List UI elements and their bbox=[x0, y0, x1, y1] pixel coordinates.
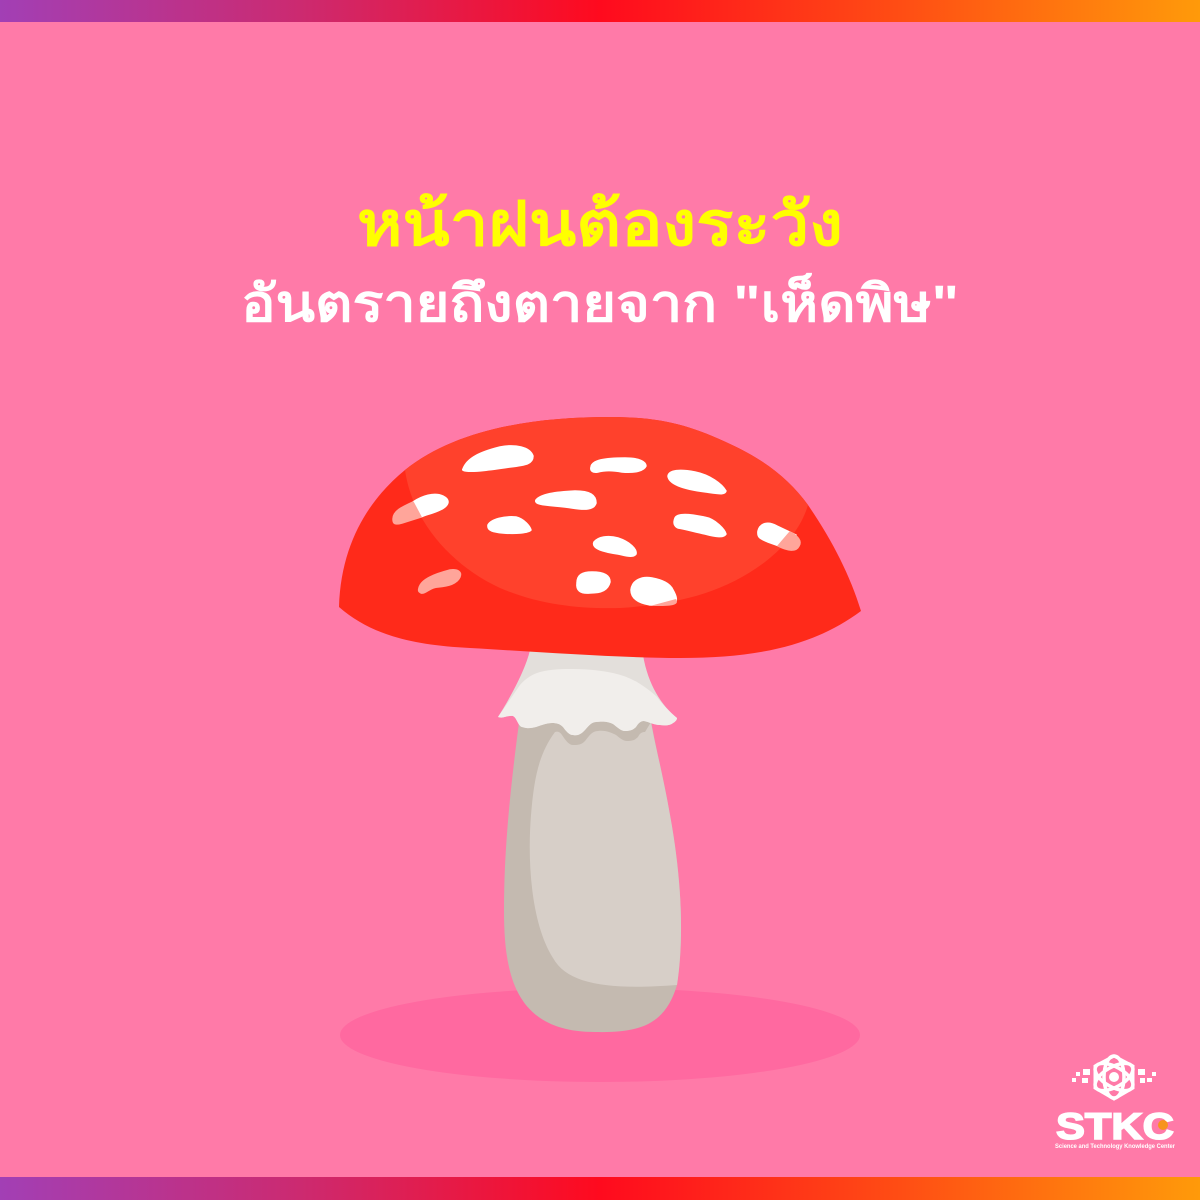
bottom gradient bar bbox=[0, 1177, 1200, 1200]
logo orange dot bbox=[1158, 1120, 1168, 1130]
logo tagline: Science and Technology Knowledge Center bbox=[1055, 1144, 1176, 1150]
mushroom cap bbox=[339, 410, 861, 658]
cap spots bbox=[393, 446, 800, 606]
ground shadow bbox=[340, 988, 860, 1082]
title line: yellow heading: หน้าฝนต้องระวัง bbox=[357, 190, 843, 258]
title bbox=[241, 190, 959, 332]
mushroom ring skirt bbox=[498, 650, 677, 735]
title line: white subheading: อันตรายถึงตายจาก "เห็ดพิษ" bbox=[241, 273, 959, 332]
mushroom illustration bbox=[339, 410, 861, 1032]
top gradient bar bbox=[0, 0, 1200, 22]
logo wordmark: STKC bbox=[1056, 1106, 1174, 1147]
mushroom stem bbox=[504, 715, 681, 1032]
STKC logo bbox=[1055, 1056, 1176, 1150]
logo atom icon bbox=[1072, 1056, 1156, 1099]
cap highlight bbox=[405, 410, 808, 608]
